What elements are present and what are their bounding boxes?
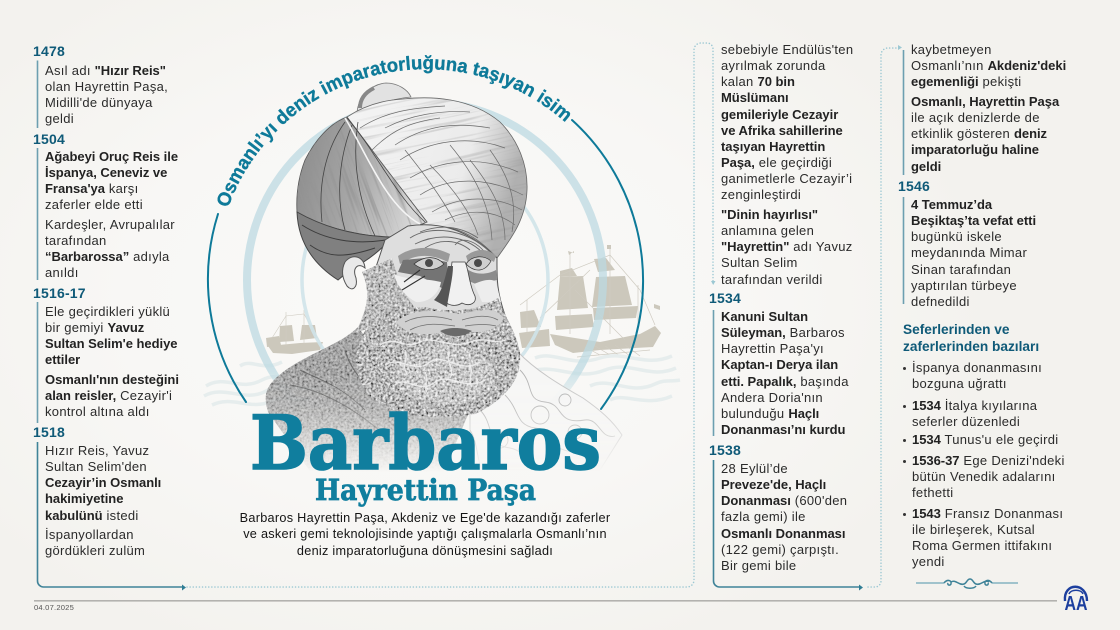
year 1546: 1546 xyxy=(898,178,930,194)
year 1478: 1478 xyxy=(33,43,65,59)
waves xyxy=(204,356,680,405)
moustache xyxy=(396,310,504,334)
year 1504: 1504 xyxy=(33,131,65,147)
bullet 2: 1534 İtalya kıyılarına seferler düzenledi xyxy=(912,398,1037,429)
arc heading: Osmanlı’yı deniz imparatorluğuna taşıyan isim xyxy=(218,55,570,206)
bullet 3: 1534 Tunus'u ele geçirdi xyxy=(912,432,1058,447)
entry 1534: Kanuni Sultan Süleyman, Barbaros Hayrettin Paşa'yı Kaptan-ı Derya ilan etti. Papalık, başında Andera Doria'nın bulunduğu Haçlı Donanması’nı kurdu xyxy=(721,309,849,437)
ship right xyxy=(519,245,661,357)
AA logo xyxy=(1064,587,1088,615)
ear xyxy=(343,257,365,289)
entry 1504 second: Kardeşler, Avrupalılar tarafından “Barbarossa” adıyla anıldı xyxy=(45,217,175,280)
campaigns list xyxy=(903,360,1065,569)
bottom rule xyxy=(34,600,1057,602)
entry 1516-17 second: Osmanlı'nın desteğini alan reisler, Cezayir'i kontrol altına aldı xyxy=(45,372,179,419)
AA logo: AA xyxy=(1064,593,1088,615)
entry 1516-17: Ele geçirdikleri yüklü bir gemiyi Yavuz Sultan Selim'e hediye ettiler xyxy=(45,304,178,367)
year 1534: 1534 xyxy=(709,290,741,306)
Hayrettin name note: "Dinin hayırlısı" anlamına gelen "Hayrettin" adı Yavuz Sultan Selim tarafından verildi xyxy=(721,207,853,287)
campaigns heading: Seferlerinden ve zaferlerinden bazıları xyxy=(903,322,1039,354)
ornament xyxy=(916,579,1018,588)
timeline column 1 xyxy=(33,43,179,558)
forehead wrinkles xyxy=(410,227,490,256)
entry 1478: Asıl adı "Hızır Reis" olan Hayrettin Paşa, Midilli'de dünyaya geldi xyxy=(45,62,168,126)
continuation text: sebebiyle Endülüs'ten ayrılmak zorunda kalan 70 bin Müslümanı gemileriyle Cezayir ve Afrika sahillerine taşıyan Hayrettin Paşa, ele geçirdiği ganimetlerle Cezayir’i zenginleştirdi xyxy=(721,42,853,202)
timeline connectors xyxy=(38,43,904,590)
concentric rings xyxy=(243,100,607,390)
year 1516-17: 1516-17 xyxy=(33,285,86,301)
entry 1518 second: İspanyollardan gördükleri zulüm xyxy=(45,527,145,558)
year 1518: 1518 xyxy=(33,424,65,440)
body xyxy=(266,327,622,468)
sideburn hair xyxy=(356,258,414,332)
head and face xyxy=(375,225,505,320)
cap xyxy=(357,83,411,113)
decorative arc xyxy=(208,120,643,409)
intro paragraph: Barbaros Hayrettin Paşa, Akdeniz ve Ege'de kazandığı zaferler ve askeri gemi teknolojisinde yaptığı çalışmalarla Osmanlı’nın deniz imparatorluğuna dönüşmesini sağladı xyxy=(240,511,610,558)
turban right xyxy=(347,98,527,258)
entry 1546: 4 Temmuz’da Beşiktaş’ta vefat etti bugünkü iskele meydanında Mimar Sinan tarafından yaptırılan türbeye defnedildi xyxy=(911,197,1036,309)
cheeks xyxy=(394,274,441,302)
entry 1504: Ağabeyi Oruç Reis ile İspanya, Ceneviz ve Fransa'ya karşı zaferler elde etti xyxy=(45,149,178,212)
ship left xyxy=(266,310,323,354)
continuation text: kaybetmeyen Osmanlı’nın Akdeniz'deki egemenliği pekişti xyxy=(911,42,1066,89)
title: Barbaros xyxy=(250,399,601,487)
timeline column 3 xyxy=(898,42,1066,309)
nose xyxy=(444,262,475,305)
portrait of Barbaros xyxy=(266,82,622,468)
turban left folds xyxy=(297,117,427,238)
beard xyxy=(356,298,520,417)
mouth xyxy=(440,328,472,336)
date: 04.07.2025 xyxy=(34,603,74,612)
title: Hayrettin Paşa xyxy=(315,473,536,507)
entry 1518: Hızır Reis, Yavuz Sultan Selim'den Cezayir’in Osmanlı hakimiyetine kabulünü istedi xyxy=(45,443,161,523)
bullet 1: İspanya donanmasını bozguna uğrattı xyxy=(912,360,1042,391)
empire note: Osmanlı, Hayrettin Paşa ile açık denizlerde de etkinlik gösteren deniz imparatorluğu haline geldi xyxy=(911,94,1059,174)
band under turban xyxy=(297,212,392,280)
timeline column 2 xyxy=(709,42,853,573)
brows and eyes xyxy=(398,248,450,264)
bullet 5: 1543 Fransız Donanması ile birleşerek, Kutsal Roma Germen ittifakını yendi xyxy=(912,506,1063,569)
entry 1538: 28 Eylül’de Preveze'de, Haçlı Donanması (600'den fazla gemi) ile Osmanlı Donanması (122 gemi) çarpıştı. Bir gemi bile xyxy=(721,461,847,573)
bullet 4: 1536-37 Ege Denizi'ndeki bütün Venedik adalarını fethetti xyxy=(912,453,1065,500)
year 1538: 1538 xyxy=(709,442,741,458)
